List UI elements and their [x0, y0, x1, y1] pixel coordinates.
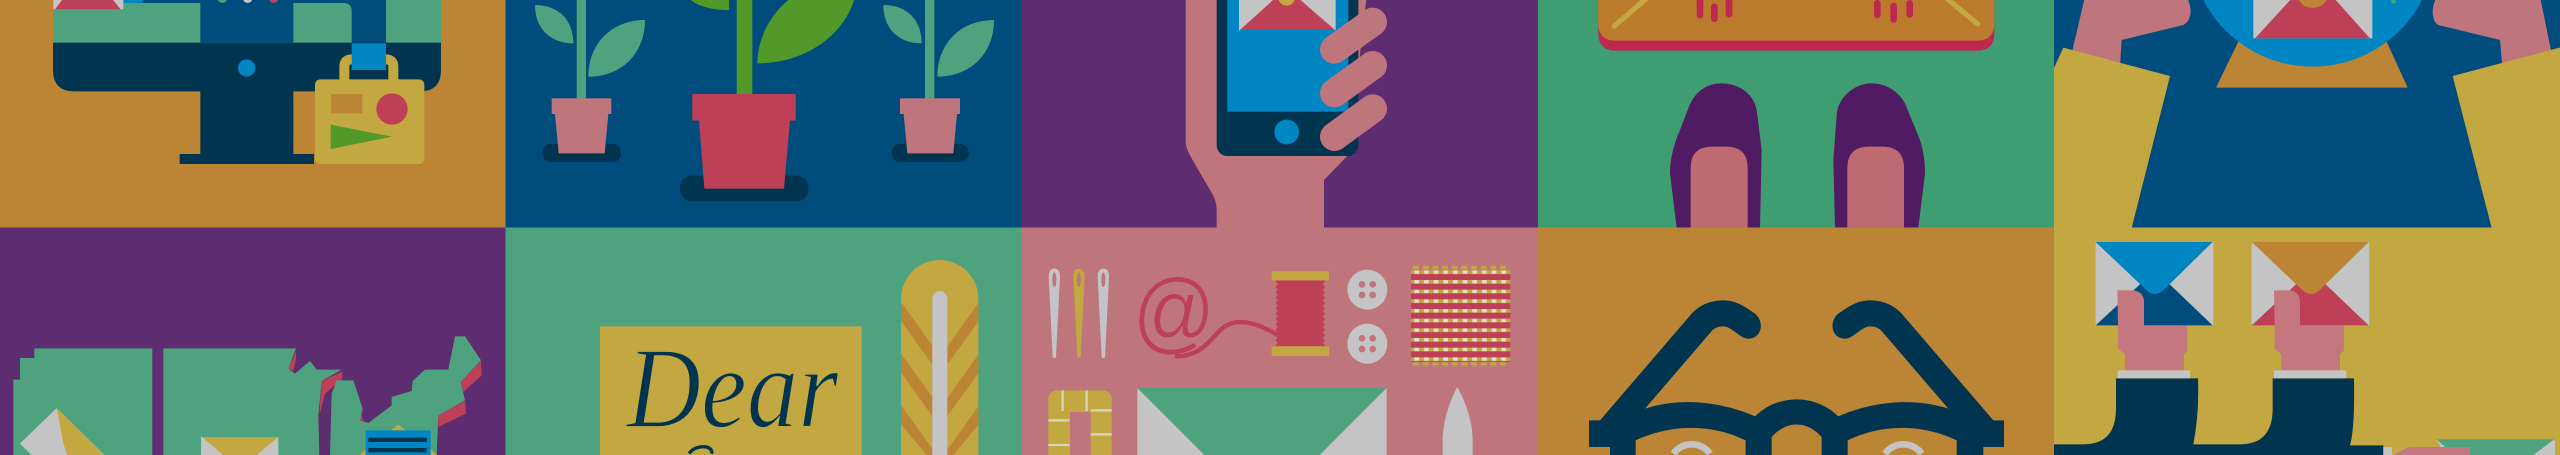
icon: woven fabric	[1411, 265, 1510, 366]
icon: table	[1598, 0, 1994, 51]
icon: left shoe	[1670, 83, 1762, 228]
panel: three potted plants	[506, 0, 1022, 228]
icon: envelope on phone	[1239, 0, 1336, 30]
icon: hand palm	[1186, 0, 1367, 230]
icon: envelope on monitor	[53, 0, 123, 9]
map: western states	[13, 348, 152, 455]
icon: orange envelope in hand	[2252, 242, 2369, 378]
icon: blue card	[359, 425, 437, 455]
icon: feather	[901, 260, 978, 455]
second line pen stroke	[689, 447, 712, 454]
panel: monitor with luggage tag	[0, 0, 506, 228]
icon: measuring tape	[1048, 390, 1112, 455]
icon: suit sleeves	[2050, 378, 2383, 455]
icon: blue envelope in hand	[2096, 242, 2213, 378]
icon: globe stand	[2216, 42, 2408, 88]
icon: needles	[1049, 269, 1109, 358]
panel: hands holding envelopes	[2054, 228, 2560, 455]
text: Dear: Dear	[625, 325, 839, 452]
icon: computer monitor	[53, 0, 441, 164]
icon: spectacles	[1589, 300, 2004, 455]
icon: center large plant	[680, 0, 858, 201]
panel: map of the USA with envelopes	[0, 228, 506, 455]
icon: envelope on map	[201, 437, 278, 455]
icon: at-sign thread: @	[1133, 261, 1215, 362]
icon: right small plant	[883, 0, 994, 162]
icon: thread spool	[1272, 271, 1329, 356]
icon: right hand	[2433, 0, 2552, 67]
icon: at-sign thread	[1133, 261, 1278, 362]
icon: corner envelope and hand	[2383, 439, 2555, 455]
panel: glasses	[1538, 228, 2054, 455]
icon: smartphone	[1217, 0, 1358, 156]
icon: seam ripper blade	[1443, 387, 1473, 455]
left jacket sleeve	[2050, 48, 2170, 228]
icon: right shoe	[1833, 83, 1925, 228]
icon: left hand	[2072, 0, 2191, 67]
icon: globe with envelope	[2190, 0, 2436, 67]
note card	[600, 325, 862, 455]
panel: Dear note and feather	[506, 228, 1022, 455]
right jacket sleeve	[2453, 47, 2560, 228]
icon: fingers	[1334, 22, 1373, 137]
icon: large envelope	[1137, 388, 1387, 455]
panel: figure holding globe	[2054, 0, 2560, 228]
panel: sewing kit	[1022, 228, 1538, 455]
icon: buttons	[1347, 270, 1387, 364]
icon: tilted envelope	[20, 408, 104, 455]
icon: left small plant	[535, 0, 645, 162]
map: central and eastern states	[163, 336, 482, 455]
icon: luggage tag	[315, 43, 424, 164]
panel: hand holding phone	[1022, 0, 1538, 228]
panel: desk and shoes	[1538, 0, 2054, 228]
